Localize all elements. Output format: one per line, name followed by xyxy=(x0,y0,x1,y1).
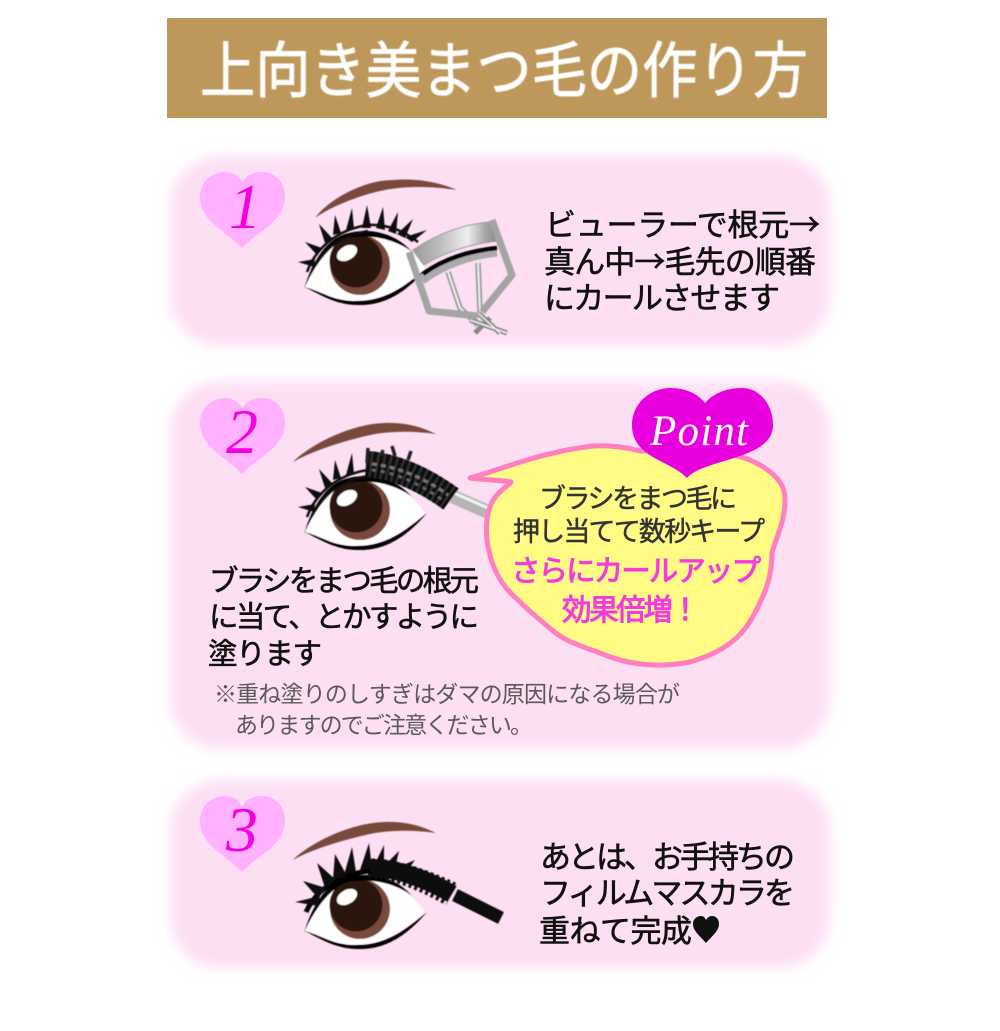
icon: mascara brush head xyxy=(366,446,451,501)
step 1 text: にカールさせます xyxy=(544,273,780,318)
icon: heart xyxy=(693,916,719,943)
icon: eye with black mascara xyxy=(293,822,501,949)
step 1 text: 真ん中→毛先の順番 xyxy=(544,237,816,282)
panel: step 3 xyxy=(170,780,830,968)
step 1 text xyxy=(544,200,820,318)
icon: eye with eyelash curler xyxy=(298,180,512,333)
step 3 text: あとは、お手持ちの xyxy=(540,832,795,877)
heart badge: 3 xyxy=(200,794,285,872)
heart badge: 2: 2 xyxy=(226,396,258,467)
panel: step 2 xyxy=(170,381,830,749)
callout: point bubble xyxy=(470,388,785,665)
step 3 text: フィルムマスカラを xyxy=(540,868,795,913)
title banner xyxy=(167,18,827,118)
callout text: 効果倍増！ xyxy=(562,587,700,629)
step 2 text: 塗ります xyxy=(208,631,322,673)
panel: step 1 xyxy=(170,156,830,346)
step 2 text: ブラシをまつ毛の根元 xyxy=(209,558,479,600)
heart badge: 1 xyxy=(200,171,285,248)
heart badge: 1: 1 xyxy=(229,171,261,242)
step 2 text xyxy=(208,558,479,673)
step 3 text xyxy=(539,832,795,951)
heart: Point xyxy=(632,388,773,478)
step 3 text: 重ねて完成 xyxy=(539,906,692,951)
note: ありますのでご注意ください。 xyxy=(235,706,533,740)
heart badge: 3: 3 xyxy=(225,794,258,865)
callout text: ブラシをまつ毛に xyxy=(539,477,737,516)
icon: eye with mascara brush xyxy=(293,423,488,550)
icon: eyelash curler xyxy=(409,220,512,333)
callout text: さらにカールアップ xyxy=(511,548,761,590)
heart: Point: Point xyxy=(649,408,749,455)
step 1 text: ビューラーで根元→ xyxy=(545,200,820,245)
icon: thick lashes xyxy=(295,843,415,906)
note: ※重ね塗りのしすぎはダマの原因になる場合が xyxy=(214,675,680,709)
callout text xyxy=(511,477,765,629)
icon: silver brush handle xyxy=(452,493,488,512)
step 2 text: に当て、とかすように xyxy=(209,594,479,636)
note xyxy=(214,675,680,740)
title text: 上向き美まつ毛の作り方 xyxy=(200,21,808,110)
icon: black brush handle xyxy=(455,895,501,918)
callout text: 押し当てて数秒キープ xyxy=(513,510,765,549)
heart badge: 2 xyxy=(200,396,285,474)
icon: black mascara brush head xyxy=(368,861,455,903)
